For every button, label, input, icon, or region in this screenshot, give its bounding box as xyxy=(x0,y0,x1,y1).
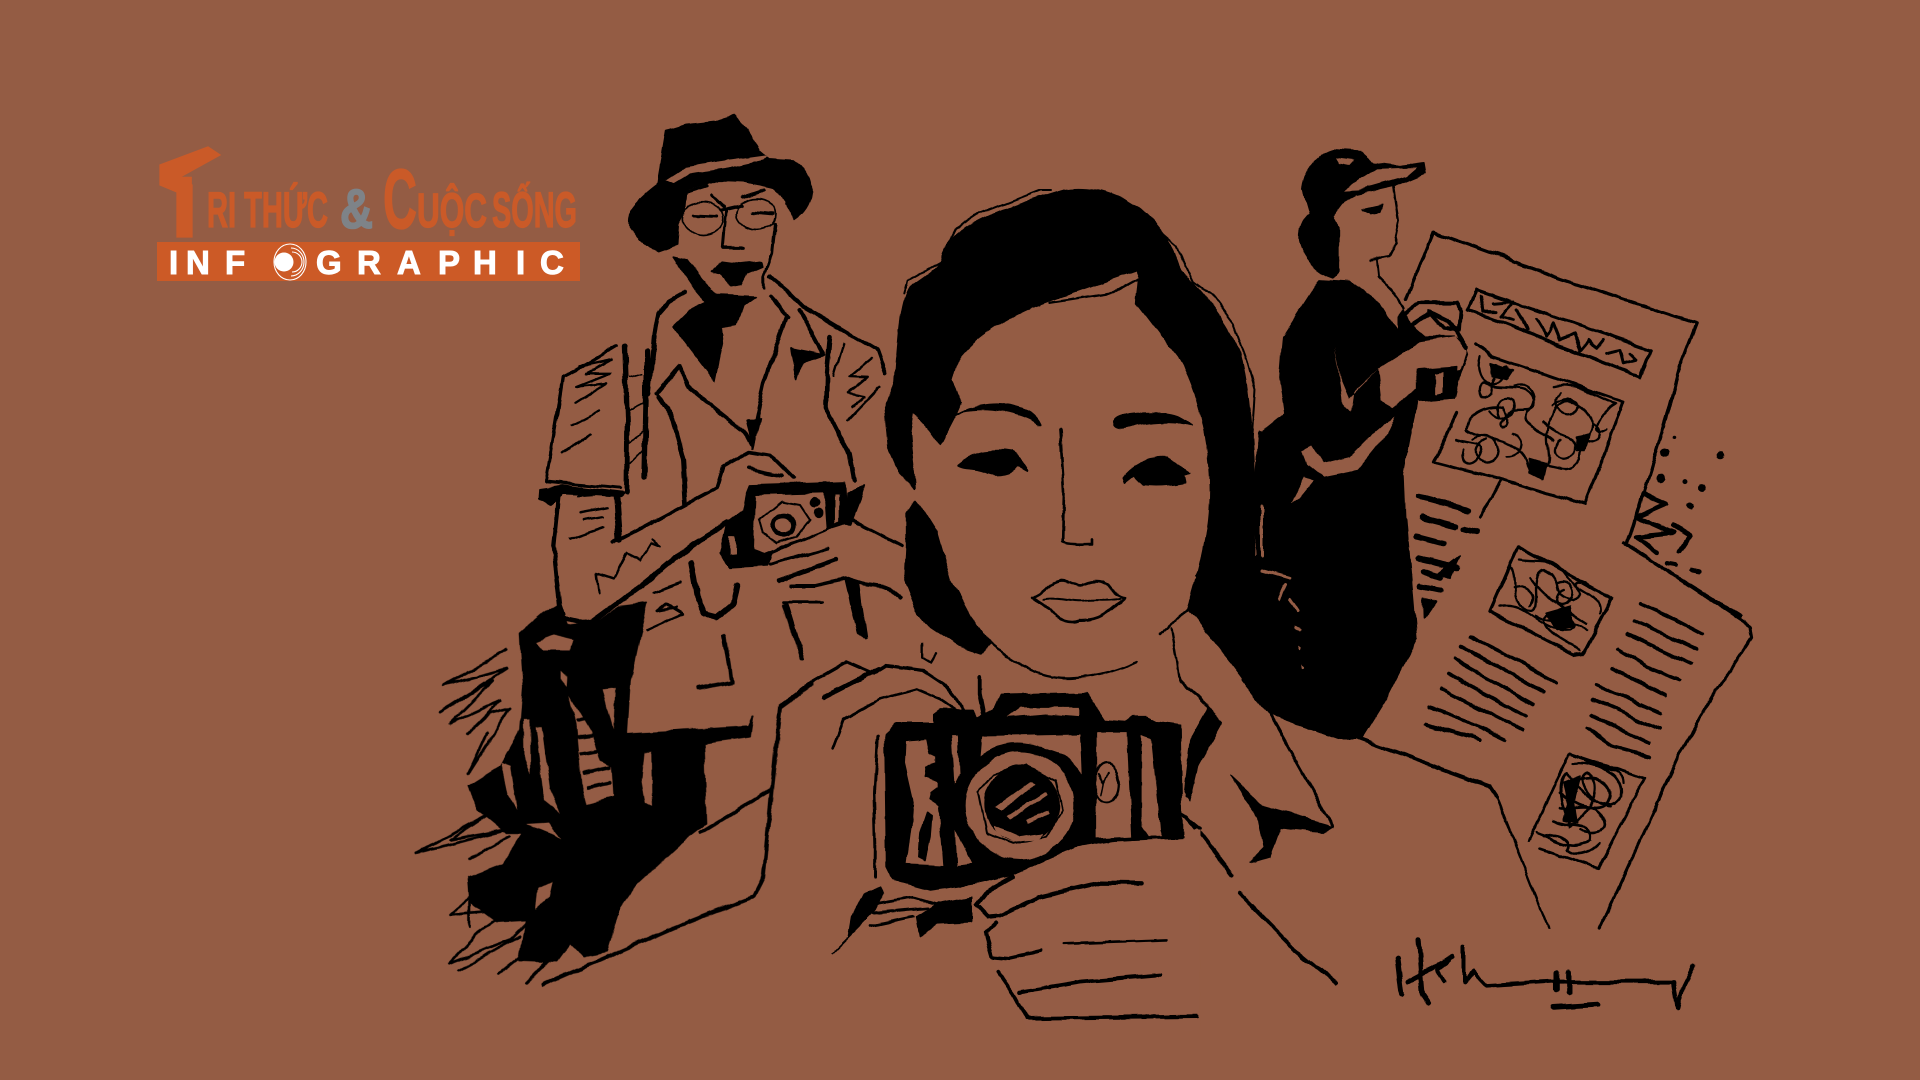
camera lens xyxy=(956,743,1079,867)
man: hand and shirt details xyxy=(647,486,902,680)
front page bottom image xyxy=(1528,753,1645,868)
foreground woman: hair xyxy=(885,189,1303,680)
logo wordmark xyxy=(160,147,577,256)
woman with cap: dress lower mass xyxy=(1243,433,1415,737)
newspaper main image xyxy=(1433,343,1623,517)
foreground woman: collar xyxy=(1180,680,1336,983)
foliage scribbles xyxy=(417,650,567,983)
man: legs and jacket outline xyxy=(543,605,810,985)
woman with cap: figure xyxy=(1243,150,1467,737)
foreground woman: brows and eyes xyxy=(952,405,1192,486)
man: arm, hand and small camera xyxy=(539,452,902,680)
foreground woman: camera and hands xyxy=(780,662,1200,1030)
logo infographic banner: A xyxy=(397,244,421,281)
man: head and upper body xyxy=(547,115,885,503)
front page top image xyxy=(1490,547,1612,655)
man: neck and shirt collar xyxy=(654,257,885,448)
logo infographic banner: N xyxy=(186,244,210,281)
newspaper headline xyxy=(1468,290,1651,377)
newspaper outline xyxy=(1407,232,1740,617)
logo ampersand: & xyxy=(340,177,373,240)
man: arm xyxy=(539,452,793,623)
signature xyxy=(1397,941,1693,1008)
woman with cap: head xyxy=(1299,150,1425,308)
logo infographic banner: R xyxy=(357,244,381,281)
front page outline xyxy=(1600,543,1752,928)
logo infographic banner: C xyxy=(540,244,564,281)
logo infographic banner: G xyxy=(316,244,342,281)
logo infographic banner: I xyxy=(169,244,178,281)
newspaper small text xyxy=(1417,497,1476,617)
man: face xyxy=(683,186,776,287)
logo wordmark: RI THỨC xyxy=(207,182,328,238)
illustration: woman with newspapers xyxy=(1243,150,1752,1008)
man: sleeves and straps xyxy=(547,337,880,503)
foreground woman: nose xyxy=(1060,430,1092,544)
foreground woman: head xyxy=(885,189,1303,680)
woman with cap: dress and arms xyxy=(1260,280,1467,620)
logo infographic banner: F xyxy=(225,244,245,281)
newspaper: front page xyxy=(1358,543,1752,1008)
man: camera bag and foliage xyxy=(417,603,810,985)
camera bag xyxy=(468,603,753,962)
man: hat xyxy=(627,115,811,252)
logo infographic banner: O xyxy=(279,254,290,270)
logo infographic banner: I xyxy=(516,244,525,281)
logo wordmark: C xyxy=(383,152,417,246)
illustration: woman in foreground with camera xyxy=(780,189,1336,1030)
newspaper ink marks xyxy=(1637,436,1723,572)
logo wordmark: SỐNG xyxy=(492,181,577,238)
illustration: man with hat and camera xyxy=(417,115,902,985)
front page text lines xyxy=(1426,603,1703,756)
camera xyxy=(885,693,1182,890)
left hand xyxy=(780,662,984,953)
logo wordmark: UỘC xyxy=(417,183,487,238)
logo wordmark: T xyxy=(170,160,192,256)
chair details xyxy=(1252,505,1303,668)
right hand xyxy=(977,813,1200,1030)
logo infographic banner: H xyxy=(473,244,497,281)
newspaper: back page xyxy=(1407,232,1740,617)
logo infographic banner xyxy=(157,242,580,281)
foreground woman: lips xyxy=(1032,580,1125,622)
foreground woman: jaw and neck xyxy=(922,493,1213,680)
logo: Tri Thức & Cuộc Sống Infographic xyxy=(157,147,580,281)
man: small camera xyxy=(719,482,846,567)
logo infographic banner: P xyxy=(438,244,460,281)
